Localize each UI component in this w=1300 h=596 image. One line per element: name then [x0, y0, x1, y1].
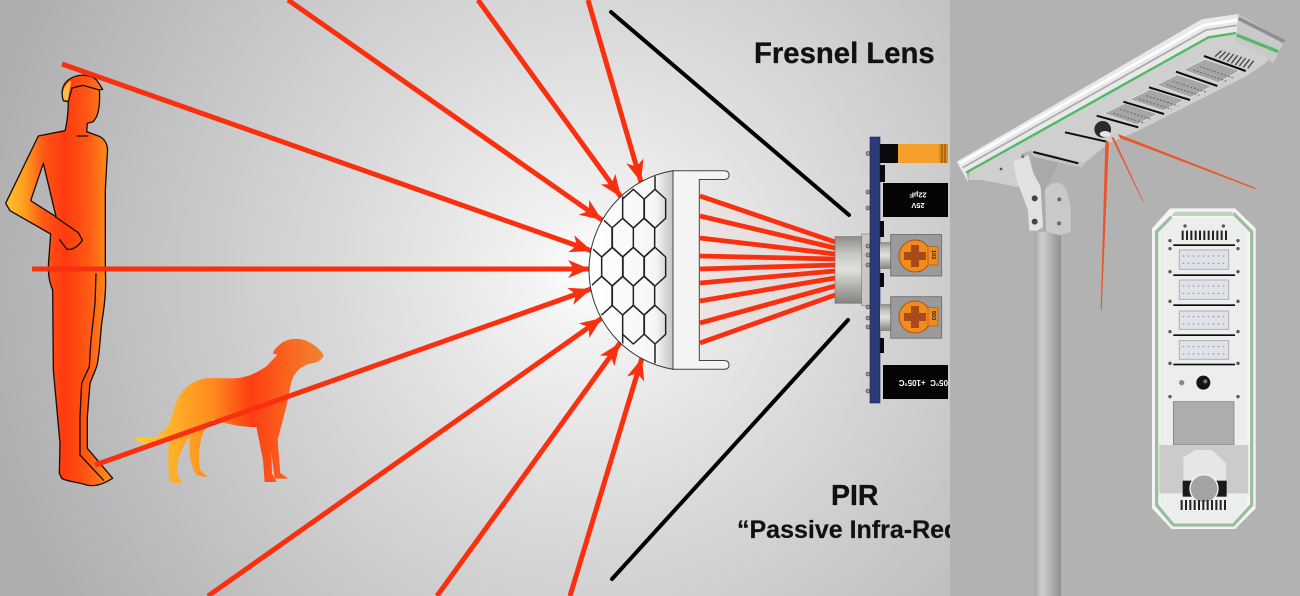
black separator bars [1065, 56, 1246, 142]
motion sensor on lamp [1094, 121, 1111, 138]
outer white shell [1152, 208, 1256, 529]
ray: top left [288, 0, 602, 220]
shadowed centre web [1032, 142, 1058, 230]
black recess [1183, 481, 1227, 497]
lamp pole [1034, 232, 1061, 596]
ray: from head of person [62, 64, 592, 251]
capacitor 25V 22uF: 22µF [909, 190, 927, 200]
lamp end cap [1236, 14, 1285, 63]
lamp body [967, 33, 1275, 173]
LED modules [1104, 59, 1239, 125]
heading: Fresnel Lens: Fresnel Lens [754, 37, 935, 70]
sensor barrel [835, 237, 862, 303]
LED chip texture [1183, 256, 1226, 354]
ray: from waist of person [32, 266, 590, 272]
right panel background [950, 0, 1300, 596]
Fresnel lens dome with hexagon facets [589, 170, 673, 369]
trimmer upper [880, 234, 942, 276]
trimmer lower [880, 297, 942, 338]
ray: from feet through dog [95, 289, 591, 465]
ray: bottom right [570, 358, 642, 596]
rim stripes [960, 20, 1237, 173]
solar street lamp, underside view [957, 14, 1285, 310]
focused beams from lens to sensor [700, 196, 835, 343]
trimmer lower: 503 [930, 311, 936, 320]
background: grey radial glow [0, 0, 950, 596]
ray: top centre [478, 0, 621, 197]
vents [1183, 231, 1226, 240]
left gusset plate [968, 150, 1025, 187]
capacitor 105C: 05°C +105°C [898, 378, 948, 387]
bracket plate [1159, 445, 1248, 493]
orange component [880, 144, 948, 163]
black field-of-view lines [611, 12, 849, 579]
bottom vents [1182, 500, 1225, 510]
subheading: Passive Infra-Red (cropped by the right panel): “Passive Infra-Red [737, 516, 959, 544]
grey plate [1173, 402, 1234, 445]
LED chip texture [1113, 67, 1233, 123]
rear arm [1045, 183, 1071, 235]
ray: bottom left [208, 318, 602, 596]
sensor [1179, 376, 1210, 390]
small board parts [880, 165, 885, 353]
lamp rim, white edge [957, 14, 1238, 183]
mounting bracket [968, 142, 1071, 235]
vent grille [1215, 51, 1254, 68]
green trim [1157, 213, 1252, 525]
front arm [1013, 155, 1043, 231]
sensor collar [862, 234, 870, 306]
bracket arm with black bar [1030, 151, 1085, 168]
LED modules [1179, 250, 1229, 359]
ray: bottom centre [437, 343, 620, 596]
infrared rays converging on the lens [32, 0, 642, 596]
lens flange [673, 171, 729, 369]
ray: top right [588, 0, 641, 182]
pale light fan behind the focused beams [700, 196, 835, 343]
trimmer upper: 103 [930, 250, 936, 259]
pole socket [1190, 475, 1218, 503]
sensor detection rays [1101, 134, 1256, 310]
capacitor 25V 22uF [883, 183, 948, 217]
capacitor 105C [883, 365, 948, 399]
bracket arm [1183, 450, 1226, 483]
figure: dog silhouette in heat colours [134, 339, 323, 483]
lamp seen from below [1152, 208, 1256, 529]
mounting screws [1168, 224, 1240, 398]
heading: PIR: PIR [831, 480, 879, 512]
solder joints [866, 152, 870, 393]
PIR sensor and circuit board [835, 137, 948, 403]
blue PCB [870, 137, 880, 403]
inner tray [1161, 218, 1247, 522]
black separator bars [1173, 244, 1235, 365]
capacitor 25V 22uF: 25V [911, 201, 925, 210]
figure: human silhouette in heat colours [6, 75, 113, 486]
